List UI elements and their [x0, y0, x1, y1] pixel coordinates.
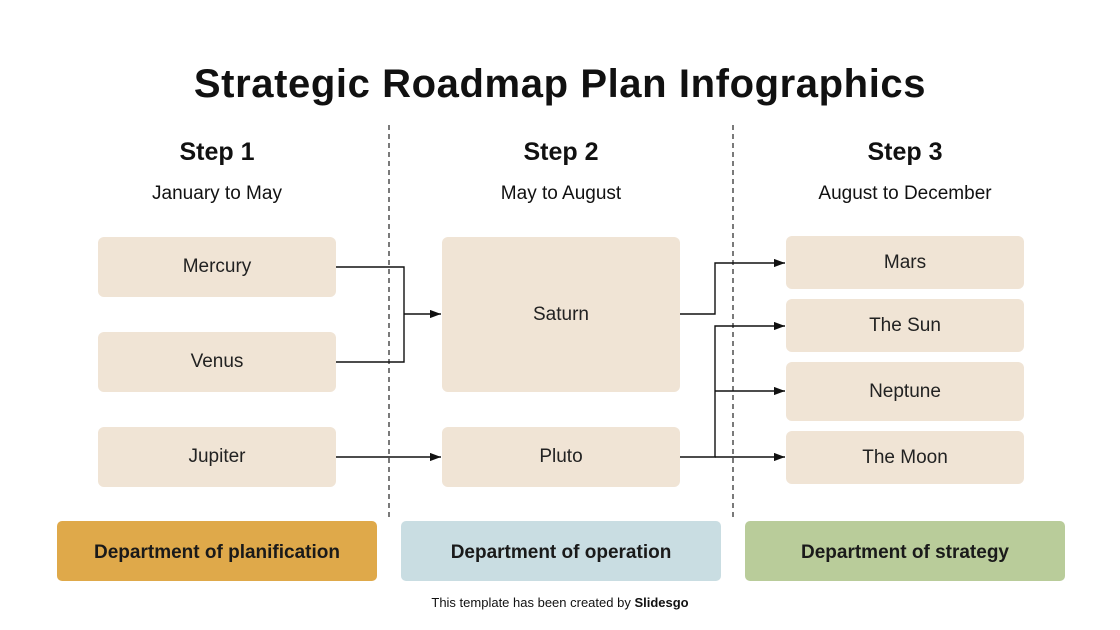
box: Neptune: Neptune [869, 380, 941, 402]
box: Mars [786, 236, 1024, 289]
step 3 heading: August to December [818, 183, 992, 204]
step 2 heading [501, 138, 621, 204]
box: Neptune [786, 362, 1024, 421]
box: Pluto [442, 427, 680, 487]
department: strategy: Department of strategy [801, 542, 1009, 563]
box: Jupiter [98, 427, 336, 487]
box: Saturn [442, 237, 680, 392]
step 1 heading: Step 1 [179, 138, 255, 166]
step 2 heading: May to August [501, 183, 621, 204]
box: The Sun: The Sun [869, 314, 941, 336]
box: Jupiter: Jupiter [188, 446, 246, 467]
box: The Moon [786, 431, 1024, 484]
department: strategy [745, 521, 1065, 581]
step 2 heading: Step 2 [523, 138, 599, 166]
step 3 heading: Step 3 [867, 138, 943, 166]
step 1 heading [152, 138, 282, 204]
title: Strategic Roadmap Plan Infographics [194, 62, 926, 106]
department: planification: Department of planification [94, 542, 340, 563]
department: planification [57, 521, 377, 581]
box: Mercury: Mercury [183, 256, 251, 277]
department: operation: Department of operation [451, 542, 671, 563]
step 1 heading: January to May [152, 183, 282, 204]
box: The Sun [786, 299, 1024, 352]
step 3 heading [818, 138, 992, 204]
box: Mars: Mars [884, 252, 926, 272]
box: The Moon: The Moon [862, 446, 948, 468]
department: operation [401, 521, 721, 581]
box: Venus [98, 332, 336, 392]
box: Saturn: Saturn [533, 304, 589, 324]
box: Mercury [98, 237, 336, 297]
footer credit: This template has been created by Slidesgo [431, 595, 689, 610]
box: Venus: Venus [191, 351, 243, 372]
box: Pluto: Pluto [539, 446, 583, 467]
